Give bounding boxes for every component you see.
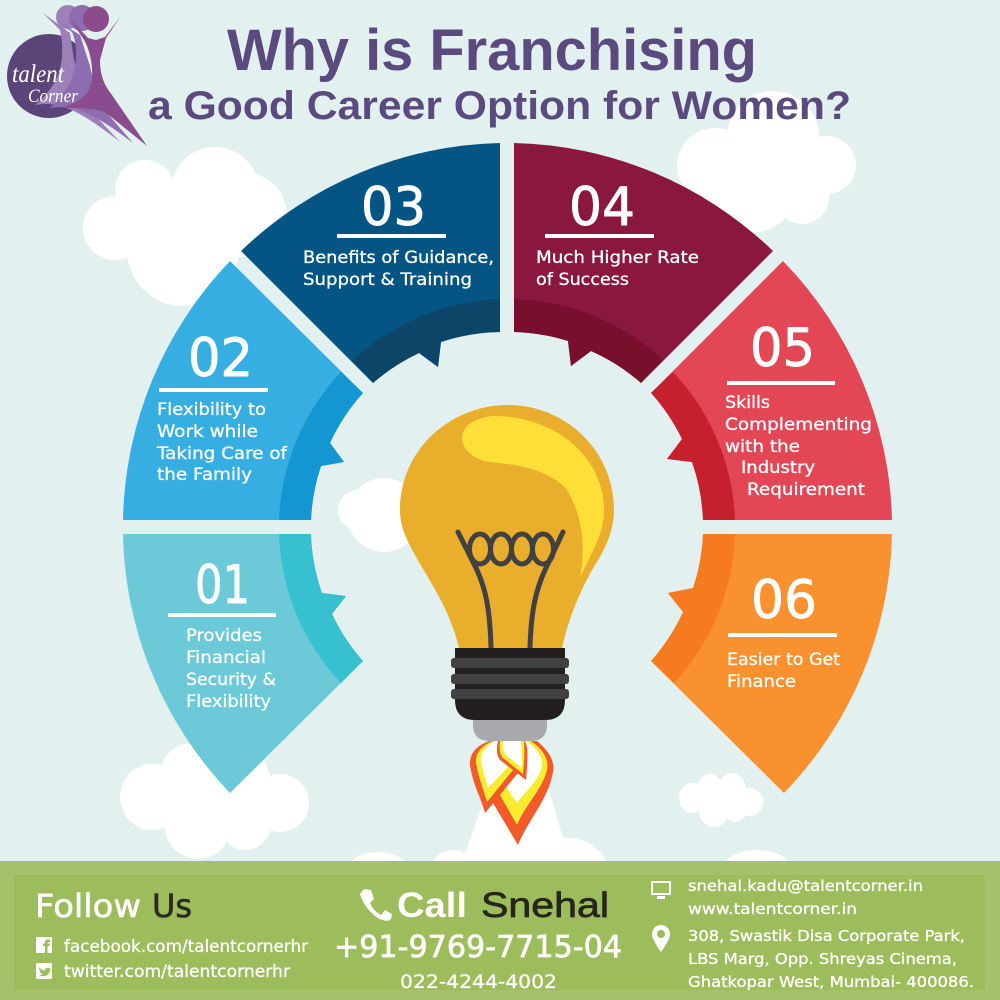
text: facebook link: facebook.com/talentcornerhr — [64, 937, 308, 957]
cloud: centre left — [338, 478, 421, 552]
panel 01: financial security: Flexibility — [186, 692, 271, 712]
icon: facebook — [36, 937, 52, 953]
text: email and website: snehal.kadu@talentcorner.in — [688, 877, 923, 895]
text: address: LBS Marg, Opp. Shreyas Cinema, — [688, 950, 957, 968]
panel 04: higher success: of Success — [536, 270, 629, 290]
panel 03: guidance: 03 — [361, 177, 426, 238]
panel 02: flexibility: Work while — [157, 422, 258, 442]
panel 06: finance: Finance — [727, 672, 796, 692]
title: a Good Career Option for Women? — [148, 84, 851, 128]
logo: Talent Corner — [7, 5, 147, 146]
logo: Talent Corner: Corner — [28, 86, 79, 107]
logo: Talent Corner: talent — [12, 61, 65, 88]
panel 01: financial security — [123, 534, 363, 793]
text: address: 308, Swastik Disa Corporate Park, — [688, 927, 965, 945]
heading: call snehal: Snehal — [481, 886, 609, 925]
text: email and website — [688, 877, 923, 918]
panel 05: skills: Complementing — [725, 415, 872, 435]
panel 03: guidance — [241, 143, 500, 383]
text: landline number: 022-4244-4002 — [400, 971, 557, 993]
panel 01: financial security: Provides — [186, 626, 262, 646]
panel 06: finance: 06 — [751, 570, 817, 631]
panel 03: guidance: Benefits of Guidance, — [303, 248, 494, 268]
panel 05: skills: 05 — [750, 318, 815, 379]
heading: follow us: Follow — [35, 887, 141, 925]
cloud: upper left — [83, 147, 287, 306]
panel 01: financial security: 01 — [195, 555, 250, 616]
panel 03: guidance: Support & Training — [303, 270, 472, 290]
panel 05: skills: Requirement — [747, 480, 865, 500]
panel 04: higher success: Much Higher Rate — [536, 248, 699, 268]
panel 02: flexibility: Taking Care of — [156, 444, 288, 464]
icon: rocket flames — [470, 741, 553, 845]
panel 02: flexibility: 02 — [188, 328, 253, 389]
cloud: upper right — [677, 91, 856, 233]
cloud: lower left — [120, 744, 309, 859]
panel 05: skills: with the — [725, 437, 800, 457]
text: email and website: www.talentcorner.in — [688, 900, 857, 918]
panel 04: higher success — [514, 143, 773, 383]
title — [148, 18, 851, 128]
icon: phone — [360, 889, 392, 921]
footer panel — [0, 861, 1000, 1000]
panel 05: skills: Industry — [741, 458, 815, 478]
panel 01: financial security: Financial — [186, 648, 266, 668]
icon: twitter — [36, 963, 52, 979]
panel 05: skills: Skills — [725, 393, 770, 413]
panel 02: flexibility: the Family — [157, 465, 252, 485]
text: twitter link: twitter.com/talentcornerhr — [64, 962, 290, 982]
panel 06: finance — [651, 534, 892, 793]
icon: monitor — [652, 882, 670, 898]
heading: follow us — [35, 887, 192, 925]
cloud: horizon bumps and rocket exhaust — [346, 790, 793, 918]
heading: call snehal — [397, 886, 609, 925]
icon: light bulb — [400, 405, 614, 741]
panel 04: higher success: 04 — [569, 177, 635, 238]
heading: follow us: Us — [152, 887, 192, 925]
heading: call snehal: Call — [397, 886, 467, 925]
icon: location pin — [652, 925, 670, 952]
panel 06: finance: Easier to Get — [727, 650, 840, 670]
panel 01: financial security: Security & — [186, 670, 276, 690]
cloud: lower right — [679, 773, 763, 827]
text: address: Ghatkopar West, Mumbai- 400086. — [688, 973, 974, 991]
title: Why is Franchising — [227, 18, 757, 83]
panel 02: flexibility — [123, 261, 363, 520]
text: mobile number: +91-9769-7715-04 — [334, 930, 622, 965]
panel 05: skills — [651, 261, 892, 520]
panel 02: flexibility: Flexibility to — [157, 400, 266, 420]
text: address — [688, 927, 974, 991]
